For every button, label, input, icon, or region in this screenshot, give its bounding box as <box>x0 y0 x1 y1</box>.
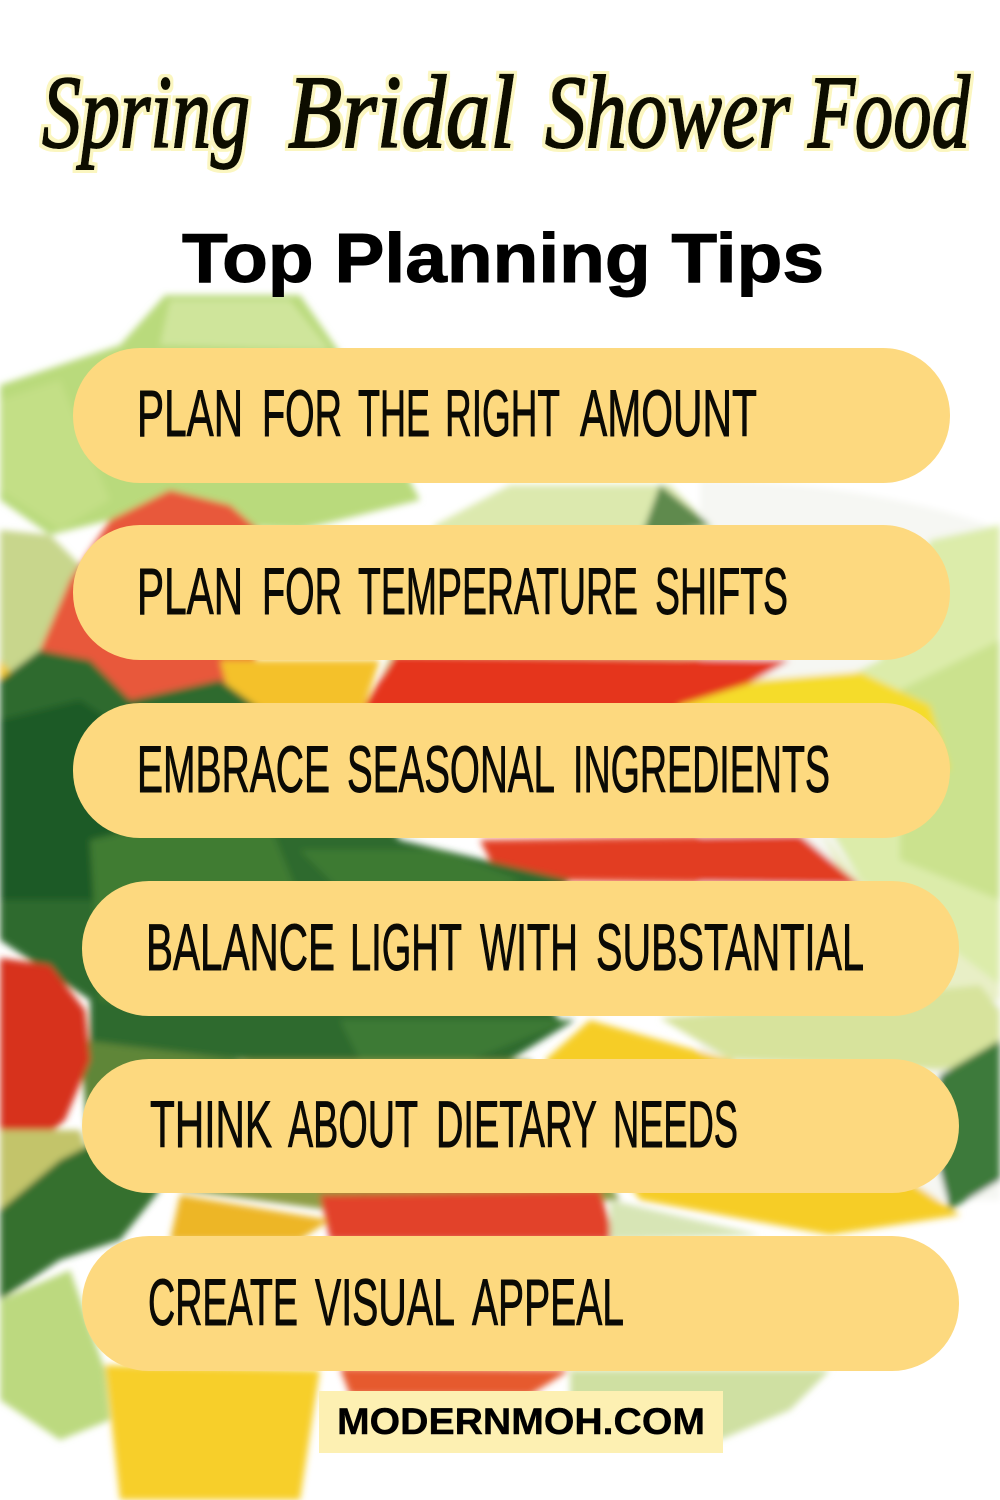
red tomato left <box>0 958 90 1162</box>
tip 6: APPEAL <box>472 1265 624 1339</box>
plate shadow <box>700 480 1000 1200</box>
lower mid salad <box>180 1060 620 1210</box>
lettuce right <box>800 525 1000 985</box>
tip 4: BALANCE <box>146 910 335 984</box>
tip 5 <box>82 1059 959 1193</box>
cucumber lower <box>610 1200 760 1240</box>
yellow pepper mid <box>545 1020 960 1235</box>
tip 2: TEMPERATURE <box>358 554 638 628</box>
tomato bottom <box>340 1368 570 1395</box>
tip 1 <box>73 348 950 483</box>
tomato bottom center <box>320 1190 615 1240</box>
tip 4: LIGHT <box>350 910 462 984</box>
tip 6 <box>82 1236 959 1371</box>
cucumber left <box>0 530 85 680</box>
tip 1: AMOUNT <box>580 376 757 450</box>
yellow strip behind <box>220 660 380 740</box>
tip 5: ABOUT <box>288 1087 418 1161</box>
yellow pepper bottom <box>105 1365 320 1500</box>
tip 2: FOR <box>262 554 342 628</box>
tip 5: NEEDS <box>613 1087 738 1161</box>
cucumber bottom right <box>570 1370 830 1440</box>
tomato top left <box>40 490 270 700</box>
title: Bridal <box>288 55 515 170</box>
yellow pepper right <box>640 672 950 780</box>
parsley <box>0 650 575 1070</box>
tip 2 <box>73 525 950 660</box>
tomato lower center <box>480 835 860 885</box>
tomato center <box>365 655 790 780</box>
tip 3: EMBRACE <box>137 732 330 806</box>
title: Spring <box>42 55 250 170</box>
lettuce bottom left <box>0 1270 110 1440</box>
left bottom salad <box>0 1130 100 1290</box>
tip 3 <box>73 703 950 838</box>
tip 4: WITH <box>480 910 578 984</box>
tip 1: THE <box>358 376 430 450</box>
website badge: MODERNMOH.COM <box>337 1401 705 1442</box>
tip 5: THINK <box>150 1087 272 1161</box>
lettuce lower right <box>820 830 1000 1000</box>
tip 1: RIGHT <box>445 376 560 450</box>
lettuce top left <box>0 295 420 535</box>
title <box>42 55 971 170</box>
tip 5: DIETARY <box>436 1087 597 1161</box>
tip 6: VISUAL <box>315 1265 455 1339</box>
tip 1: PLAN <box>137 376 243 450</box>
tip 2: PLAN <box>137 554 243 628</box>
tip 1: FOR <box>262 376 342 450</box>
website badge <box>319 1391 723 1453</box>
tip 4 <box>82 881 959 1016</box>
cucumber center top <box>380 485 800 680</box>
tip 3: SEASONAL <box>347 732 555 806</box>
tip 2: SHIFTS <box>655 554 788 628</box>
title: Shower <box>545 55 790 170</box>
tip 6: CREATE <box>148 1265 298 1339</box>
cucumber right <box>660 985 1000 1070</box>
subtitle: Top Planning Tips <box>182 219 824 297</box>
